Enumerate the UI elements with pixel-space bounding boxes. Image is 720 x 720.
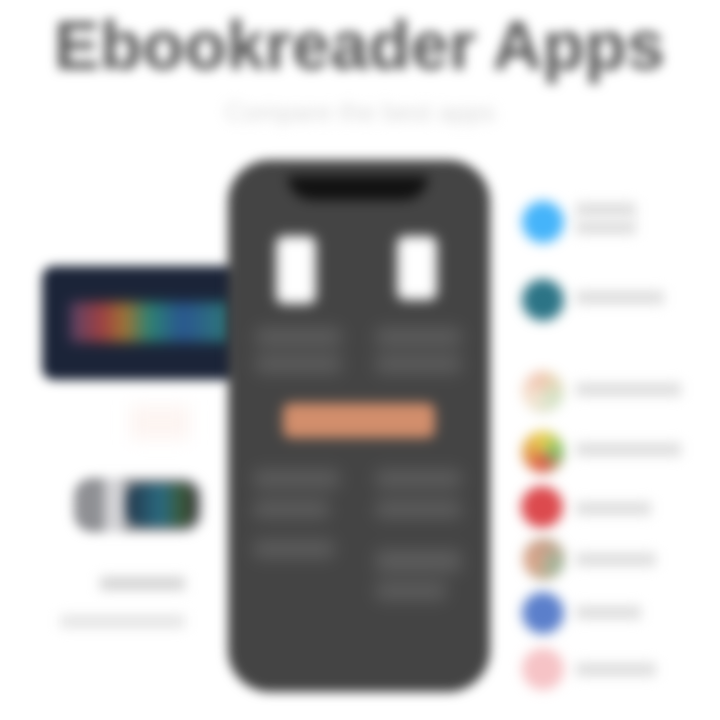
- icon: blue book app: [522, 592, 564, 634]
- icon: red app: [521, 486, 563, 528]
- label: teal app: [576, 291, 664, 304]
- lower text right 3: [376, 550, 461, 572]
- text block right top: [376, 328, 461, 346]
- lower text right 1: [376, 470, 461, 488]
- icon: teal app: [522, 279, 564, 321]
- pill light band: [104, 478, 124, 532]
- title: Ebookreader Apps: [54, 7, 665, 84]
- pill dark segment: [126, 484, 196, 526]
- label: tan app: [576, 553, 656, 566]
- caption under pill: [58, 572, 189, 631]
- faint connector marks: [130, 405, 190, 440]
- icon: multicolor app 2: [522, 431, 564, 473]
- text block left top 2: [256, 355, 341, 373]
- label: blue book app: [576, 606, 641, 619]
- subtitle: Compare the best apps: [225, 97, 495, 127]
- white card right: [397, 236, 437, 300]
- label: multicolor app 2: [576, 443, 681, 456]
- caption line 2: [60, 615, 185, 628]
- icon: multicolor app 1: [522, 371, 564, 413]
- label: pink app: [576, 663, 656, 676]
- label: multicolor app 1: [576, 383, 681, 396]
- text block right top 2: [376, 355, 461, 373]
- white card left: [276, 236, 316, 304]
- icon: tan app: [523, 538, 565, 580]
- icon: blue app: [522, 201, 564, 243]
- icon: pink app: [522, 648, 564, 690]
- label: blue app line 2: [576, 221, 636, 234]
- app list: [512, 192, 684, 696]
- label: red app: [576, 502, 651, 515]
- lower text right 4: [376, 582, 446, 600]
- panel: dark tablet card: [42, 266, 242, 380]
- text block left top: [256, 328, 341, 346]
- orange button: [283, 403, 435, 438]
- notch: [288, 176, 428, 200]
- colored bars: [70, 302, 230, 342]
- panel: small pill device: [74, 478, 202, 532]
- lower text right 2: [376, 500, 461, 518]
- caption line 1: [100, 577, 185, 590]
- label: blue app: [576, 203, 636, 216]
- lower text left 3: [254, 540, 334, 558]
- lower text left 2: [254, 500, 329, 518]
- lower text left 1: [254, 470, 339, 488]
- phone: [228, 160, 490, 692]
